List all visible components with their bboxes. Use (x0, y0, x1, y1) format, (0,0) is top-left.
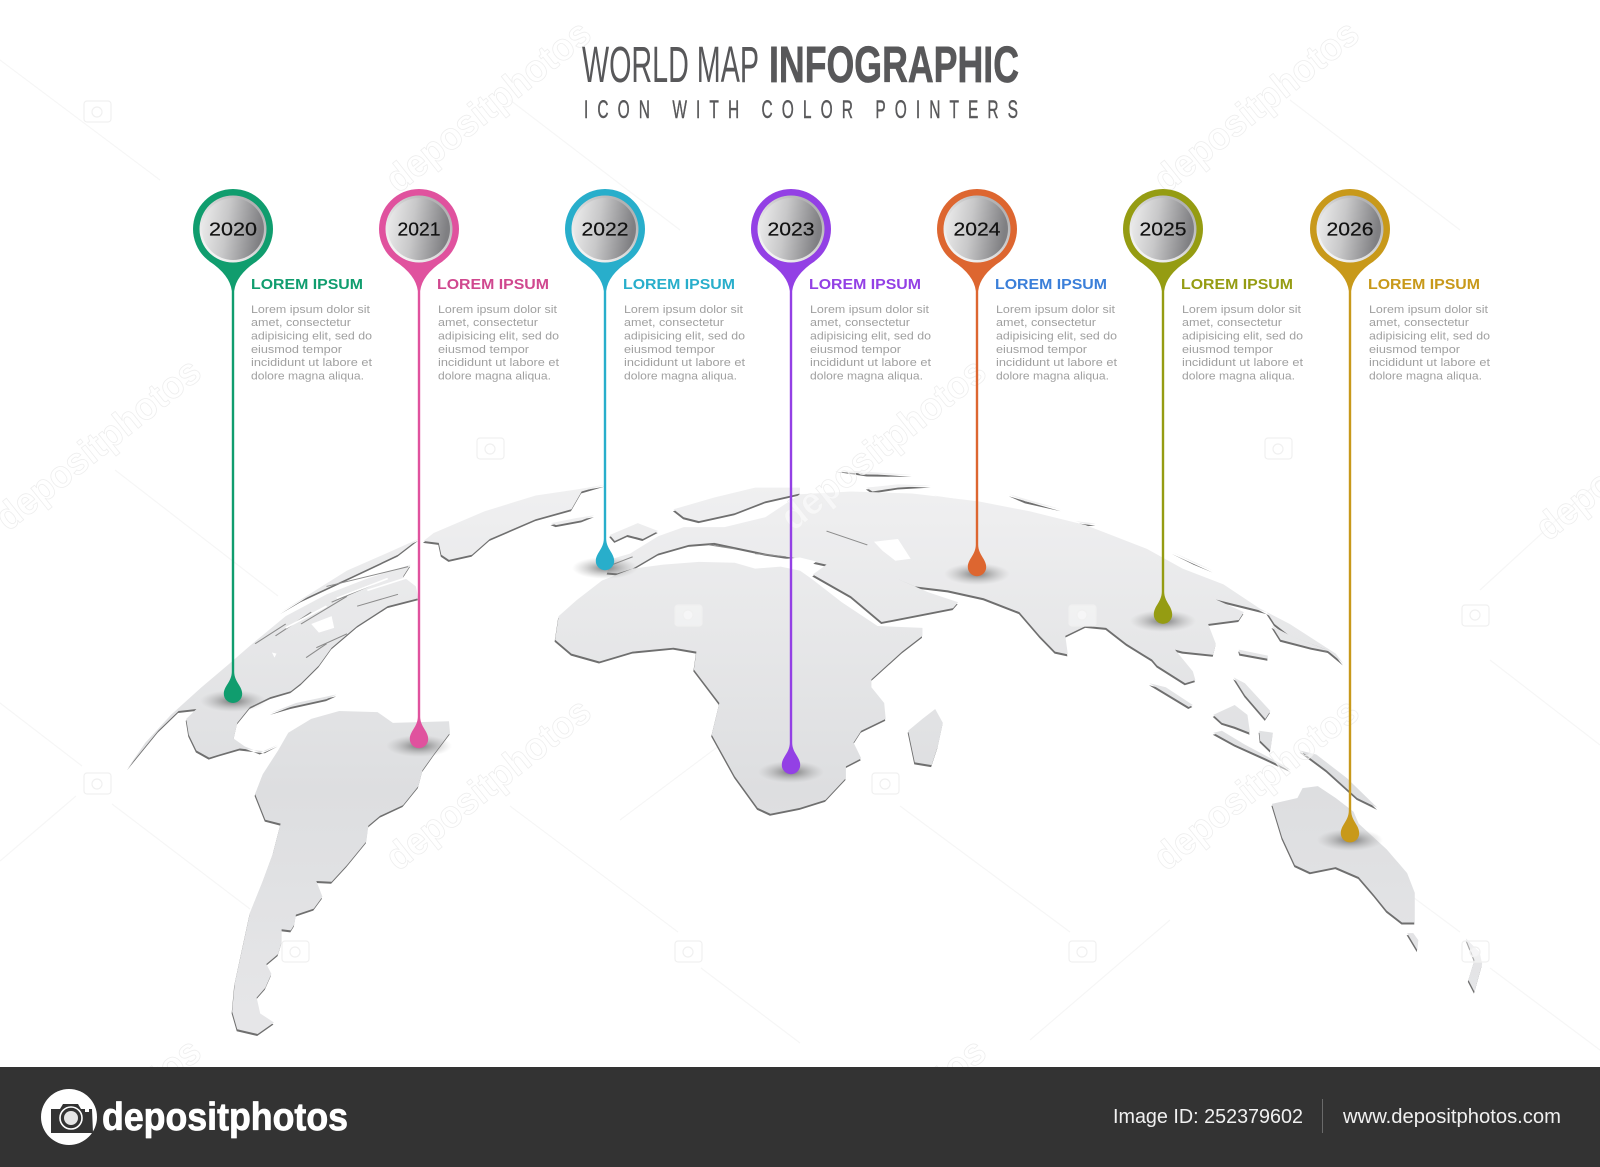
pin 2021: 2021 (398, 218, 440, 240)
pin 2026 (1310, 189, 1490, 851)
pin 2024: dolore magna aliqua. (996, 370, 1109, 382)
pin 2026: dolore magna aliqua. (1369, 370, 1482, 382)
pin 2021: adipisicing elit, sed do (438, 330, 559, 342)
pin 2021: dolore magna aliqua. (438, 370, 551, 382)
pin 2021: incididunt ut labore et (438, 357, 559, 369)
pin 2025: eiusmod tempor (1182, 344, 1273, 356)
watermark: depositphotos (378, 690, 599, 879)
pin 2024: incididunt ut labore et (996, 357, 1117, 369)
pin 2020: LOREM IPSUM (251, 276, 363, 293)
pin 2022: 2022 (582, 218, 628, 240)
pin 2021 (379, 189, 559, 757)
pin 2025: dolore magna aliqua. (1182, 370, 1295, 382)
pin 2022: adipisicing elit, sed do (624, 330, 745, 342)
pin 2025: adipisicing elit, sed do (1182, 330, 1303, 342)
pin 2025: amet, consectetur (1182, 317, 1282, 329)
pin 2021: LOREM IPSUM (437, 276, 549, 293)
pin 2022: dolore magna aliqua. (624, 370, 737, 382)
pin 2026: Lorem ipsum dolor sit (1369, 304, 1488, 316)
pin 2026: 2026 (1326, 218, 1374, 240)
subtitle: ICON WITH COLOR POINTERS (584, 96, 1018, 124)
pin 2020: eiusmod tempor (251, 344, 342, 356)
footer band: www.depositphotos.com (1342, 1106, 1561, 1128)
pin 2022: incididunt ut labore et (624, 357, 745, 369)
pin 2023: adipisicing elit, sed do (810, 330, 931, 342)
pin 2021: amet, consectetur (438, 317, 538, 329)
pin 2020: adipisicing elit, sed do (251, 330, 372, 342)
pin 2026: incididunt ut labore et (1369, 357, 1490, 369)
pin 2025: incididunt ut labore et (1182, 357, 1303, 369)
watermark: depositphotos (773, 350, 994, 539)
pin 2021: Lorem ipsum dolor sit (438, 304, 557, 316)
pin 2020: amet, consectetur (251, 317, 351, 329)
pin 2024: adipisicing elit, sed do (996, 330, 1117, 342)
pin 2026: LOREM IPSUM (1368, 276, 1480, 293)
pin 2024: amet, consectetur (996, 317, 1096, 329)
pin 2023: 2023 (768, 218, 814, 240)
pin 2022: amet, consectetur (624, 317, 724, 329)
pin 2024: eiusmod tempor (996, 344, 1087, 356)
watermark camera marks (84, 101, 1489, 962)
pin 2022: eiusmod tempor (624, 344, 715, 356)
pin 2020 (193, 189, 372, 712)
title: INFOGRAPHIC (769, 36, 1019, 93)
watermark: depositphotos (1146, 12, 1367, 201)
pin 2025: Lorem ipsum dolor sit (1182, 304, 1301, 316)
pin 2025 (1123, 189, 1303, 632)
footer band: depositphotos (102, 1096, 348, 1139)
pin 2020: Lorem ipsum dolor sit (251, 304, 370, 316)
pin 2023: Lorem ipsum dolor sit (810, 304, 929, 316)
pin 2020: incididunt ut labore et (251, 357, 372, 369)
pin 2024: 2024 (954, 218, 1000, 240)
pin 2023: LOREM IPSUM (809, 276, 921, 293)
footer band: Image ID: 252379602 (1113, 1106, 1303, 1128)
pin 2024 (937, 189, 1117, 585)
pin 2026: amet, consectetur (1369, 317, 1469, 329)
pin 2025: 2025 (1140, 218, 1186, 240)
footer band (0, 1067, 1600, 1167)
pin 2020: 2020 (209, 218, 257, 240)
pin 2026: eiusmod tempor (1369, 344, 1460, 356)
pin 2025: LOREM IPSUM (1181, 276, 1293, 293)
title: WORLD MAP (582, 36, 759, 93)
pin 2022: LOREM IPSUM (623, 276, 735, 293)
watermark: depositphotos (378, 12, 599, 201)
pin 2024: Lorem ipsum dolor sit (996, 304, 1115, 316)
pin 2020: dolore magna aliqua. (251, 370, 364, 382)
pin 2023: amet, consectetur (810, 317, 910, 329)
world map (127, 470, 1482, 1036)
pin 2024: LOREM IPSUM (995, 276, 1107, 293)
pin 2021: eiusmod tempor (438, 344, 529, 356)
pin 2022 (565, 189, 745, 579)
pin 2022: Lorem ipsum dolor sit (624, 304, 743, 316)
pin 2026: adipisicing elit, sed do (1369, 330, 1490, 342)
pin 2023 (751, 189, 931, 783)
watermark: depositphotos (1146, 690, 1367, 879)
pin 2023: eiusmod tempor (810, 344, 901, 356)
pin 2023: dolore magna aliqua. (810, 370, 923, 382)
pin 2023: incididunt ut labore et (810, 357, 931, 369)
